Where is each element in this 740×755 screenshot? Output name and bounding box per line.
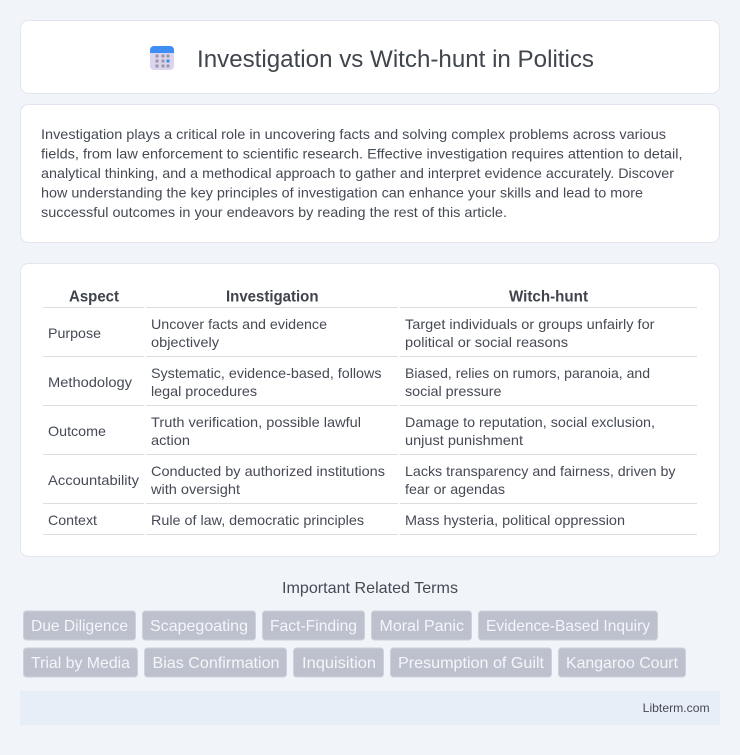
table header row	[69, 288, 589, 306]
tag: bias confirmation	[144, 648, 286, 677]
panel: introduction	[20, 104, 720, 242]
row: methodology: legal procedures	[151, 383, 257, 399]
tag: kangaroo court: Kangaroo Court	[566, 655, 679, 672]
row: accountability: with oversight	[150, 481, 240, 497]
tag: fact-finding: Fact-Finding	[270, 618, 357, 635]
tag: presumption of guilt	[390, 648, 552, 677]
intro paragraph: how understanding the key principles of investigation can enhance your skills and lead to more	[41, 184, 643, 200]
tag: presumption of guilt: Presumption of Guilt	[398, 655, 545, 672]
row: outcome: Truth verification, possible lawful	[151, 414, 361, 430]
footer bar	[20, 691, 720, 725]
panel: comparison table	[20, 264, 720, 556]
row: purpose	[48, 316, 655, 350]
tag: scapegoating: Scapegoating	[150, 618, 248, 635]
tag: scapegoating	[142, 611, 256, 640]
tag: inquisition: Inquisition	[302, 655, 376, 672]
tag: due diligence	[24, 611, 136, 640]
title: Investigation vs Witch-hunt in Politics	[197, 46, 594, 73]
row: outcome: Outcome	[48, 423, 106, 439]
row: purpose: objectively	[151, 334, 219, 350]
tag: trial by media	[24, 648, 138, 677]
row: accountability: Accountability	[48, 472, 139, 488]
tag: inquisition	[294, 648, 384, 677]
row: context: Mass hysteria, political oppression	[405, 512, 625, 528]
intro paragraph: Investigation plays a critical role in uncovering facts and solving complex problems across various	[41, 126, 666, 142]
row: outcome	[48, 414, 655, 448]
row: accountability	[48, 463, 676, 497]
row: methodology: Methodology	[48, 374, 132, 390]
row: purpose: Purpose	[48, 325, 101, 341]
row: methodology: social pressure	[405, 383, 502, 399]
row: outcome: Damage to reputation, social exclusion,	[405, 414, 655, 430]
intro paragraph	[41, 126, 682, 220]
tag: bias confirmation: Bias Confirmation	[152, 655, 280, 672]
icon: calendar	[150, 46, 174, 70]
tag: trial by media: Trial by Media	[31, 655, 130, 672]
row: outcome: unjust punishment	[405, 432, 523, 448]
table header row: Witch-hunt	[509, 288, 589, 306]
table header row: Aspect	[69, 288, 120, 306]
tag: moral panic: Moral Panic	[380, 618, 464, 635]
row: purpose: Target individuals or groups unfairly for	[405, 316, 655, 332]
row: accountability: Conducted by authorized institutions	[151, 463, 385, 479]
tags: related terms	[24, 611, 686, 677]
tag: kangaroo court	[558, 648, 686, 677]
panel: header	[20, 20, 720, 94]
intro paragraph: fields, from law enforcement to scientific research. Effective investigation requires attention to detail,	[41, 146, 682, 162]
row: methodology: Biased, relies on rumors, paranoia, and	[405, 365, 650, 381]
row: accountability: Lacks transparency and fairness, driven by	[405, 463, 676, 479]
heading: related terms: Important Related Terms	[282, 580, 458, 597]
row: purpose: Uncover facts and evidence	[151, 316, 327, 332]
tag: evidence-based inquiry: Evidence-Based Inquiry	[486, 618, 650, 635]
table header row: Investigation	[226, 288, 318, 306]
tag: moral panic	[372, 611, 472, 640]
row: context: Rule of law, democratic principles	[151, 512, 364, 528]
intro paragraph: analytical thinking, and a methodical approach to gather and interpret evidence accurately. Discover	[41, 165, 674, 181]
row: accountability: fear or agendas	[405, 481, 505, 497]
tag: fact-finding	[262, 611, 364, 640]
tag: evidence-based inquiry	[478, 611, 658, 640]
row: methodology: Systematic, evidence-based, follows	[151, 365, 382, 381]
row: context	[48, 512, 625, 528]
row: outcome: action	[151, 432, 190, 448]
footer credit: Libterm.com	[643, 701, 710, 715]
row: purpose: political or social reasons	[405, 334, 568, 350]
tag: due diligence: Due Diligence	[31, 618, 128, 635]
row: context: Context	[48, 512, 97, 528]
intro paragraph: successful outcomes in your endeavors by reading the rest of this article.	[41, 204, 507, 220]
row: methodology	[48, 365, 650, 399]
